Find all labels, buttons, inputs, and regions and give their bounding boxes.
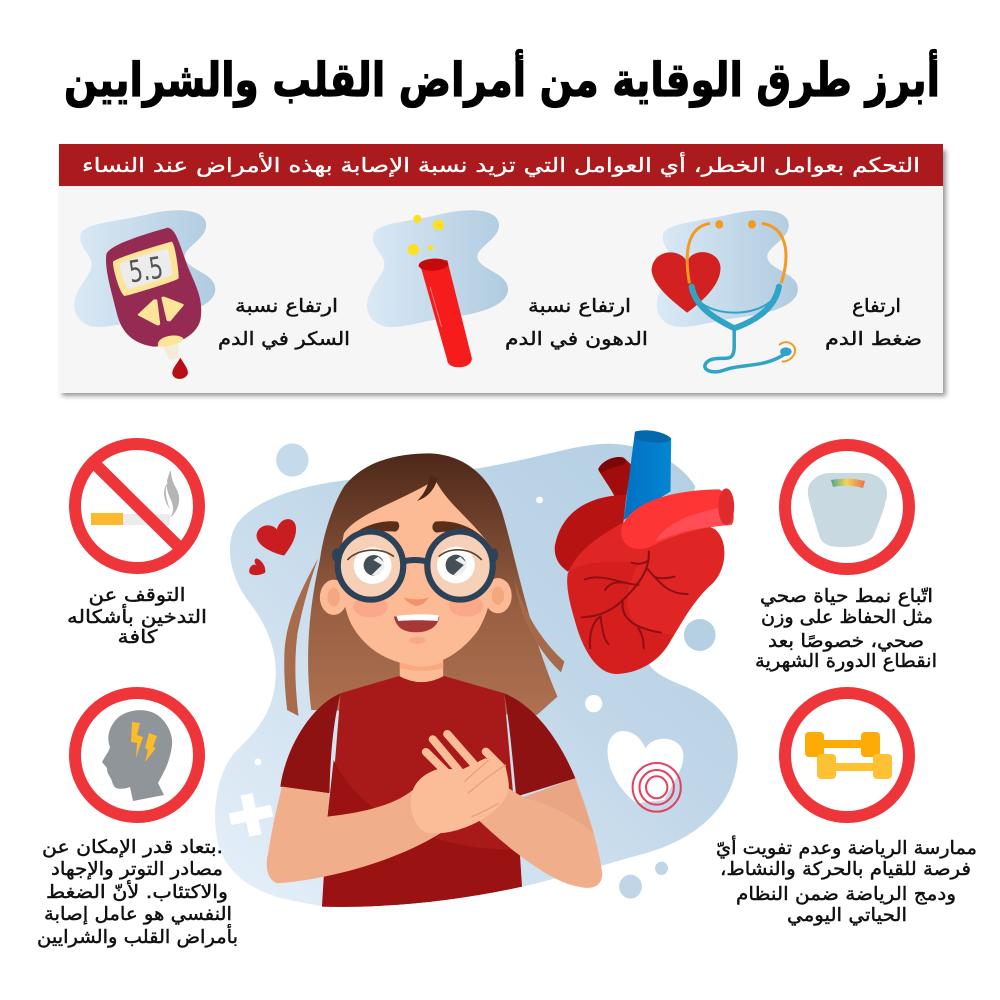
text: healthy lifestyle: اتّباع نمط حياة صحي — [760, 586, 933, 607]
text: exercise: فرصة للقيام بالحركة والنشاط، — [720, 859, 971, 880]
text: exercise: الحياتي اليومي — [787, 905, 907, 926]
shirt — [280, 676, 575, 907]
icon: stethoscope and heart — [652, 210, 798, 372]
icon: weight scale — [785, 445, 909, 569]
icon: blood vessel with fat — [367, 210, 508, 367]
text: healthy lifestyle: انقطاع الدورة الشهرية — [755, 651, 937, 672]
text: avoid stress: مصادر التوتر والإجهاد — [51, 859, 223, 880]
label: high blood pressure — [825, 296, 922, 350]
icon: dumbbells — [785, 693, 909, 817]
meter reading: 5.5 — [127, 251, 166, 290]
background blob — [215, 444, 738, 907]
text: healthy lifestyle: صحي، خصوصًا بعد — [768, 631, 924, 652]
label: high blood sugar: السكر في الدم — [218, 329, 350, 350]
banner — [59, 144, 943, 186]
panel: risk factors — [59, 144, 946, 396]
face — [320, 475, 512, 665]
text: avoid stress: والاكتئاب. لأنّ الضغط — [46, 880, 228, 903]
text: avoid stress: .بتعاد قدر الإمكان عن — [42, 837, 223, 858]
decorative dots — [254, 443, 716, 899]
text: exercise: ممارسة الرياضة وعدم تفويت أيّ — [716, 835, 977, 859]
text: healthy lifestyle — [755, 586, 937, 672]
banner: التحكم بعوامل الخطر، أي العوامل التي تزيد نسبة الإصابة بهذه الأمراض عند النساء — [82, 152, 920, 178]
central illustration: woman and heart — [215, 443, 738, 907]
hair — [284, 453, 564, 716]
icon: small hearts — [249, 519, 296, 575]
icon: glucose meter — [74, 210, 215, 379]
neck — [400, 653, 443, 687]
icon: stressed head — [75, 693, 199, 817]
label: high blood fats: ارتفاع نسبة — [528, 296, 631, 317]
text: exercise: ودمج الرياضة ضمن النظام — [736, 884, 956, 905]
icon: plus — [226, 790, 276, 840]
icon: white heart with target — [607, 731, 683, 812]
text: quit smoking — [67, 585, 207, 648]
text: avoid stress — [37, 837, 238, 948]
text: avoid stress: النفسي هو عامل إصابة — [44, 904, 232, 925]
icon: no smoking — [75, 444, 199, 568]
label: high blood pressure: ضغط الدم — [825, 329, 922, 350]
text: quit smoking: التوقف عن — [88, 585, 186, 606]
text: exercise — [716, 835, 977, 926]
label: high blood fats — [505, 296, 648, 350]
text: avoid stress: بأمراض القلب والشرايين — [37, 924, 238, 948]
text: quit smoking: كافة — [118, 627, 158, 648]
text: healthy lifestyle: مثل الحفاظ على وزن — [761, 607, 933, 628]
label: high blood fats: الدهون في الدم — [505, 329, 648, 350]
anatomical heart — [555, 430, 734, 674]
label: high blood sugar — [218, 296, 350, 350]
glasses and eyes — [332, 532, 498, 600]
label: high blood sugar: ارتفاع نسبة — [235, 296, 338, 317]
arms and hands — [267, 734, 602, 888]
text: quit smoking: التدخين بأشكاله — [67, 604, 207, 628]
label: high blood pressure: ارتفاع — [852, 296, 901, 317]
